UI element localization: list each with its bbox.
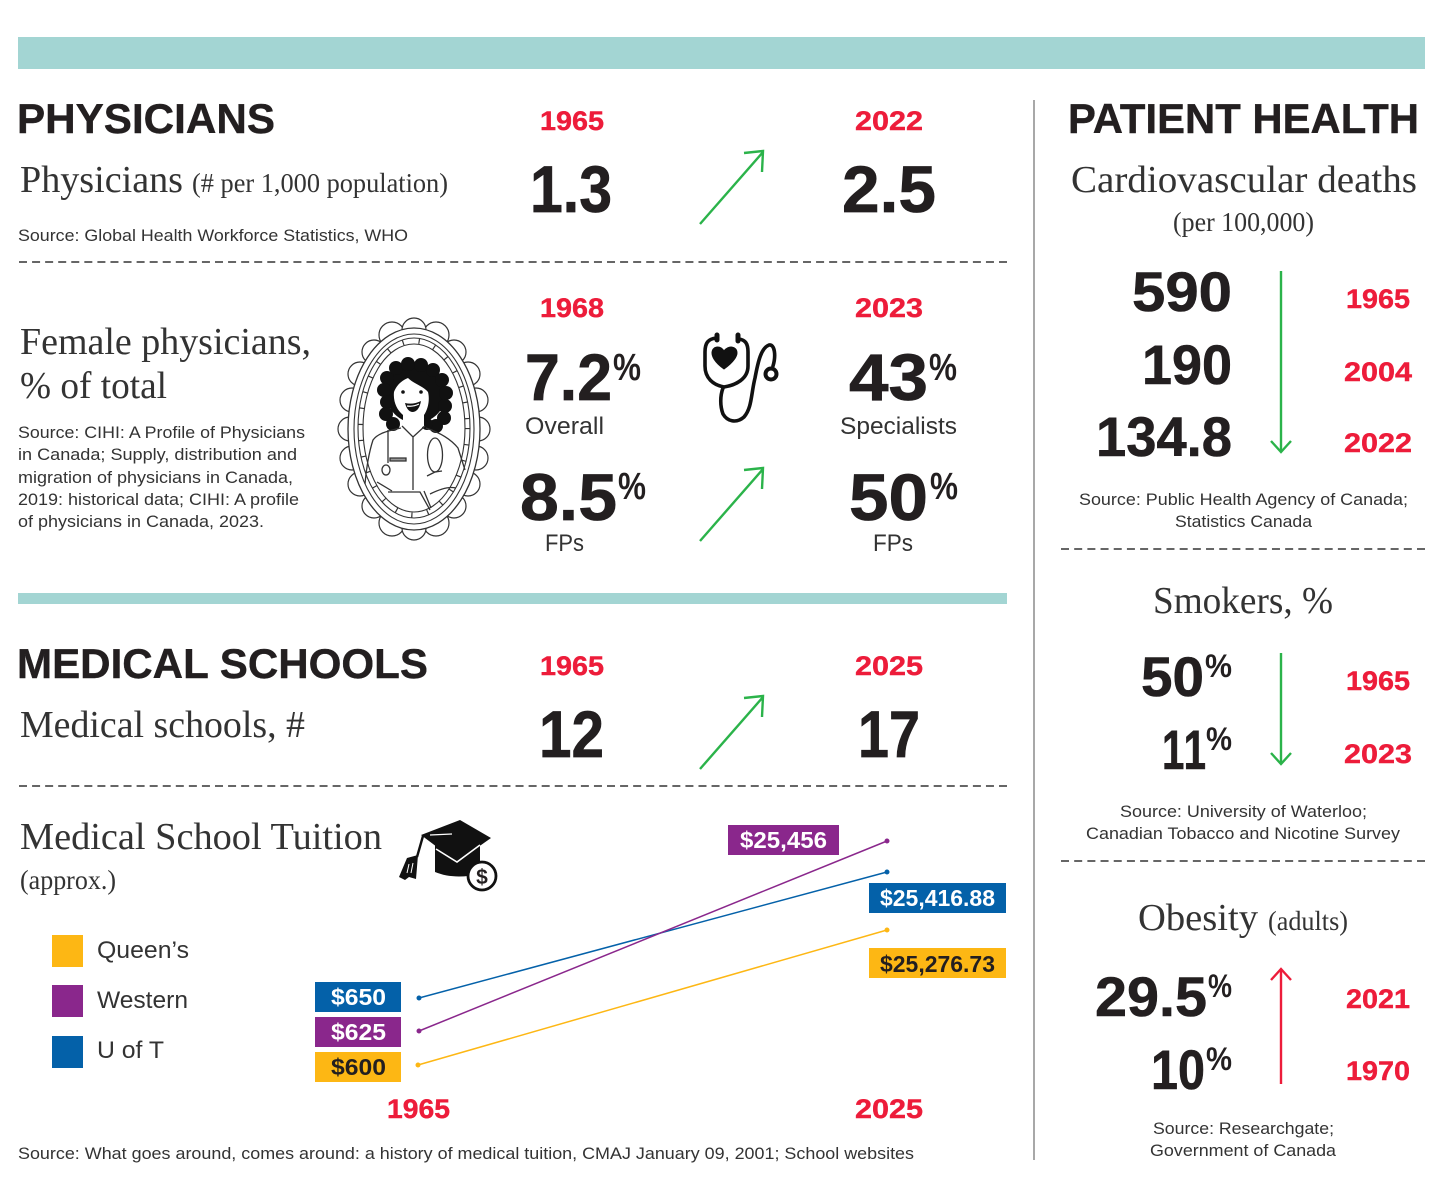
legend: U of T: U of T <box>97 1037 164 1064</box>
stat: 10% obesity: % <box>1206 1041 1232 1077</box>
value label $25,416.88: $25,416.88 <box>880 885 995 911</box>
source: CIHI: migration of physicians in Canada, <box>18 468 293 487</box>
year 1965: 1965 <box>1346 666 1410 696</box>
stat: 8.5% FPs: FPs <box>545 530 584 557</box>
source: CIHI <box>18 423 305 531</box>
source: waterloo <box>1086 802 1401 843</box>
stat: 8.5% FPs: 8.5 <box>520 460 617 534</box>
arrow up: female physicians <box>700 468 763 541</box>
value label $625 <box>315 1017 401 1047</box>
source: researchgate: Government of Canada <box>1150 1141 1337 1160</box>
cardiovascular deaths label <box>1071 159 1417 237</box>
smokers label: Smokers, % <box>1153 580 1333 622</box>
icon: graduation cap with dollar coin <box>399 820 496 890</box>
physicians per population label <box>20 159 448 201</box>
source: waterloo: Source: University of Waterloo; <box>1120 802 1367 821</box>
tuition heading <box>20 816 382 895</box>
stat: 8.5% FPs: % <box>618 466 646 508</box>
arrow up: physicians <box>700 151 763 224</box>
year label 2022: 2022 <box>855 106 923 136</box>
source: public health agency: Source: Public Health Agency of Canada; <box>1079 490 1408 509</box>
stat: 11% smokers: 11 <box>1162 720 1206 782</box>
stat: 11% smokers <box>1162 720 1232 782</box>
year label 1965: 1965 <box>540 651 604 681</box>
stat: 50% FPs: 50 <box>849 460 928 534</box>
physicians per population label: (# per 1,000 population) <box>192 168 448 198</box>
value label $600 <box>315 1052 401 1082</box>
stat: 10% obesity: 10 <box>1151 1038 1205 1101</box>
stat: 7.2% overall <box>525 340 641 440</box>
stat: 43% specialists: 43 <box>849 340 928 414</box>
panel: physicians <box>17 95 936 245</box>
source: tuition: Source: What goes around, comes around: a history of medical tuition, CMAJ January 09, 2001; School websites <box>18 1144 914 1163</box>
source: waterloo: Canadian Tobacco and Nicotine Survey <box>1086 824 1401 843</box>
source: CIHI: of physicians in Canada, 2023. <box>18 512 264 531</box>
year 2022: 2022 <box>1344 428 1412 458</box>
stat: 43% specialists <box>840 340 957 440</box>
value label $25,456: $25,456 <box>740 827 827 853</box>
stat: 8.5% FPs <box>520 460 646 557</box>
obesity label: (adults) <box>1268 906 1348 936</box>
cardiovascular deaths label: Cardiovascular deaths <box>1071 159 1417 201</box>
year label 1965: 1965 <box>540 106 604 136</box>
year 2023: 2023 <box>1344 739 1412 769</box>
value 12: 12 <box>539 697 604 771</box>
series: Queen's <box>416 928 889 1067</box>
panel: medical schools <box>17 640 923 771</box>
value label $25,276.73: $25,276.73 <box>880 951 995 977</box>
stat: 29.5% obesity: % <box>1208 968 1232 1004</box>
series: Western <box>417 839 889 1033</box>
year label 2025: 2025 <box>855 651 923 681</box>
series: U of T <box>417 870 889 1000</box>
panel: medical school tuition <box>18 816 1006 1163</box>
cardiovascular deaths label: (per 100,000) <box>1173 207 1314 237</box>
obesity label <box>1138 897 1348 939</box>
female physicians label <box>20 321 311 407</box>
year 2021: 2021 <box>1346 984 1410 1014</box>
arrow down: cardiovascular deaths <box>1271 271 1291 452</box>
source: researchgate: Source: Researchgate; <box>1153 1119 1334 1138</box>
stat: 50% FPs <box>849 460 958 557</box>
source: CIHI: in Canada; Supply, distribution and <box>18 445 297 464</box>
stat: 43% specialists: % <box>929 347 957 389</box>
legend: Queen's: Queen’s <box>97 937 189 964</box>
year 1965: 1965 <box>1346 284 1410 314</box>
female physicians label: % of total <box>20 365 167 407</box>
source: public health agency <box>1079 490 1408 531</box>
stat: 29.5% obesity: 29.5 <box>1095 965 1207 1028</box>
heading: medical schools: MEDICAL SCHOOLS <box>17 640 428 687</box>
icon: stethoscope with heart <box>705 335 776 421</box>
panel: patient health <box>1061 95 1425 1160</box>
year 1970: 1970 <box>1346 1056 1410 1086</box>
stat: 50% smokers <box>1141 645 1232 708</box>
stat: 50% FPs: % <box>930 466 958 508</box>
tuition heading: Medical School Tuition <box>20 816 382 858</box>
heading: patient health: PATIENT HEALTH <box>1068 95 1419 142</box>
icon: portrait of female doctor in scalloped oval frame <box>338 318 490 540</box>
top teal banner <box>18 37 1425 69</box>
source: researchgate <box>1150 1119 1337 1160</box>
icon: graduation cap with dollar coin: $ <box>476 866 488 889</box>
value label $25,456 <box>728 825 839 855</box>
source: public health agency: Statistics Canada <box>1175 512 1313 531</box>
section divider bar <box>18 593 1007 604</box>
arrow down: smokers <box>1271 653 1291 764</box>
value 134.8: 134.8 <box>1096 405 1232 468</box>
column divider <box>1033 100 1035 1160</box>
stat: 43% specialists: Specialists <box>840 413 957 440</box>
value 590: 590 <box>1132 260 1232 323</box>
arrow up: obesity <box>1271 969 1291 1084</box>
axis year 1965: 1965 <box>387 1094 450 1124</box>
tuition heading: (approx.) <box>20 865 116 895</box>
source: CIHI: Source: CIHI: A Profile of Physicians <box>18 423 305 442</box>
legend: Western: Western <box>97 987 188 1014</box>
hair <box>377 357 453 433</box>
value 1.3: 1.3 <box>530 152 612 226</box>
stat: 7.2% overall: % <box>613 347 641 389</box>
physicians per population label: Physicians <box>20 159 183 201</box>
heading: physicians: PHYSICIANS <box>17 95 275 142</box>
stat: 50% FPs: FPs <box>873 530 913 557</box>
value 190: 190 <box>1142 333 1232 396</box>
stat: 7.2% overall: 7.2 <box>525 340 612 414</box>
source: WHO: Source: Global Health Workforce Statistics, WHO <box>18 226 408 245</box>
stat: 50% smokers: % <box>1205 648 1232 684</box>
year label 2023: 2023 <box>855 293 923 323</box>
year label 1968: 1968 <box>540 293 604 323</box>
medical schools count label: Medical schools, # <box>20 704 305 746</box>
year 2004: 2004 <box>1344 357 1412 387</box>
female physicians label: Female physicians, <box>20 321 311 363</box>
stat: 11% smokers: % <box>1206 721 1232 757</box>
value label $650 <box>315 982 401 1012</box>
value 2.5: 2.5 <box>842 152 936 226</box>
axis year 2025: 2025 <box>855 1094 923 1124</box>
value label $600: $600 <box>331 1054 386 1080</box>
source: CIHI: 2019: historical data; CIHI: A profile <box>18 490 299 509</box>
value label $650: $650 <box>331 984 386 1010</box>
legend <box>52 935 189 1068</box>
stat: 7.2% overall: Overall <box>525 413 604 440</box>
value 17: 17 <box>858 697 920 771</box>
value label $625: $625 <box>331 1019 386 1045</box>
panel: female physicians <box>18 293 958 557</box>
arrow up: medical schools <box>700 696 763 769</box>
stat: 50% smokers: 50 <box>1141 645 1204 708</box>
obesity label: Obesity <box>1138 897 1258 939</box>
line chart: tuition 1965 to 2025 <box>315 825 1006 1124</box>
